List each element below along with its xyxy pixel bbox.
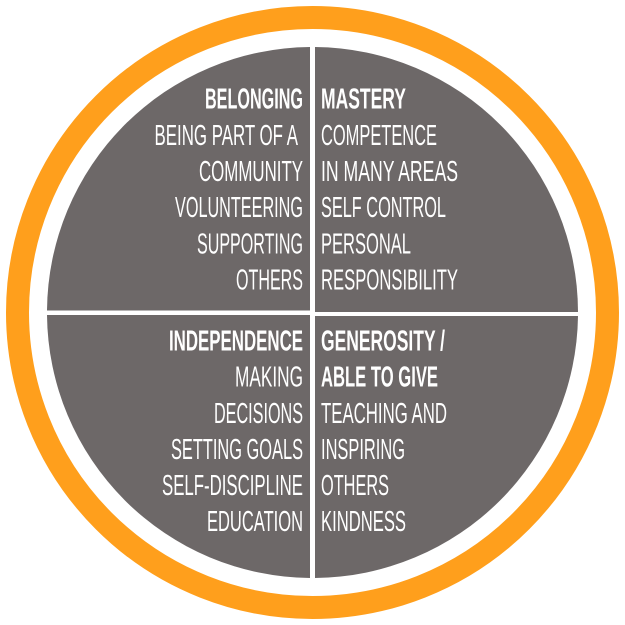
- text: independence items: SELF-DISCIPLINE: [162, 470, 303, 502]
- heading: generosity / able to give: ABLE TO GIVE: [321, 362, 438, 394]
- panel: mastery: [315, 47, 578, 312]
- text: mastery items: RESPONSIBILITY: [321, 264, 458, 296]
- text: belonging items: VOLUNTEERING: [175, 192, 303, 224]
- panel: belonging: [47, 47, 310, 310]
- heading: generosity / able to give: [321, 326, 445, 394]
- heading: belonging: BELONGING: [205, 84, 303, 116]
- text: generosity items: TEACHING AND: [321, 398, 447, 430]
- text: independence items: MAKING: [235, 362, 303, 394]
- text: independence items: SETTING GOALS: [171, 434, 303, 466]
- text: mastery items: COMPETENCE: [321, 120, 437, 152]
- text: mastery items: PERSONAL: [321, 228, 411, 260]
- text: generosity items: OTHERS: [321, 470, 389, 502]
- text: generosity items: [321, 398, 447, 538]
- text: mastery items: SELF CONTROL: [321, 192, 446, 224]
- text: independence items: [162, 362, 303, 538]
- panel: independence: [47, 315, 310, 578]
- text: mastery items: IN MANY AREAS: [321, 156, 458, 188]
- text: belonging items: OTHERS: [236, 264, 303, 296]
- heading: independence: INDEPENDENCE: [169, 326, 303, 358]
- text: mastery items: [321, 120, 458, 296]
- text: generosity items: KINDNESS: [321, 506, 406, 538]
- heading: mastery: MASTERY: [321, 84, 406, 116]
- text: independence items: DECISIONS: [214, 398, 303, 430]
- text: belonging items: COMMUNITY: [199, 156, 303, 188]
- text: belonging items: BEING PART OF A: [154, 120, 298, 152]
- text: generosity items: INSPIRING: [321, 434, 405, 466]
- heading: generosity / able to give: GENEROSITY /: [321, 326, 445, 358]
- text: belonging items: [154, 120, 303, 296]
- text: independence items: EDUCATION: [207, 506, 303, 538]
- panel: generosity: [315, 316, 578, 578]
- text: belonging items: SUPPORTING: [197, 228, 303, 260]
